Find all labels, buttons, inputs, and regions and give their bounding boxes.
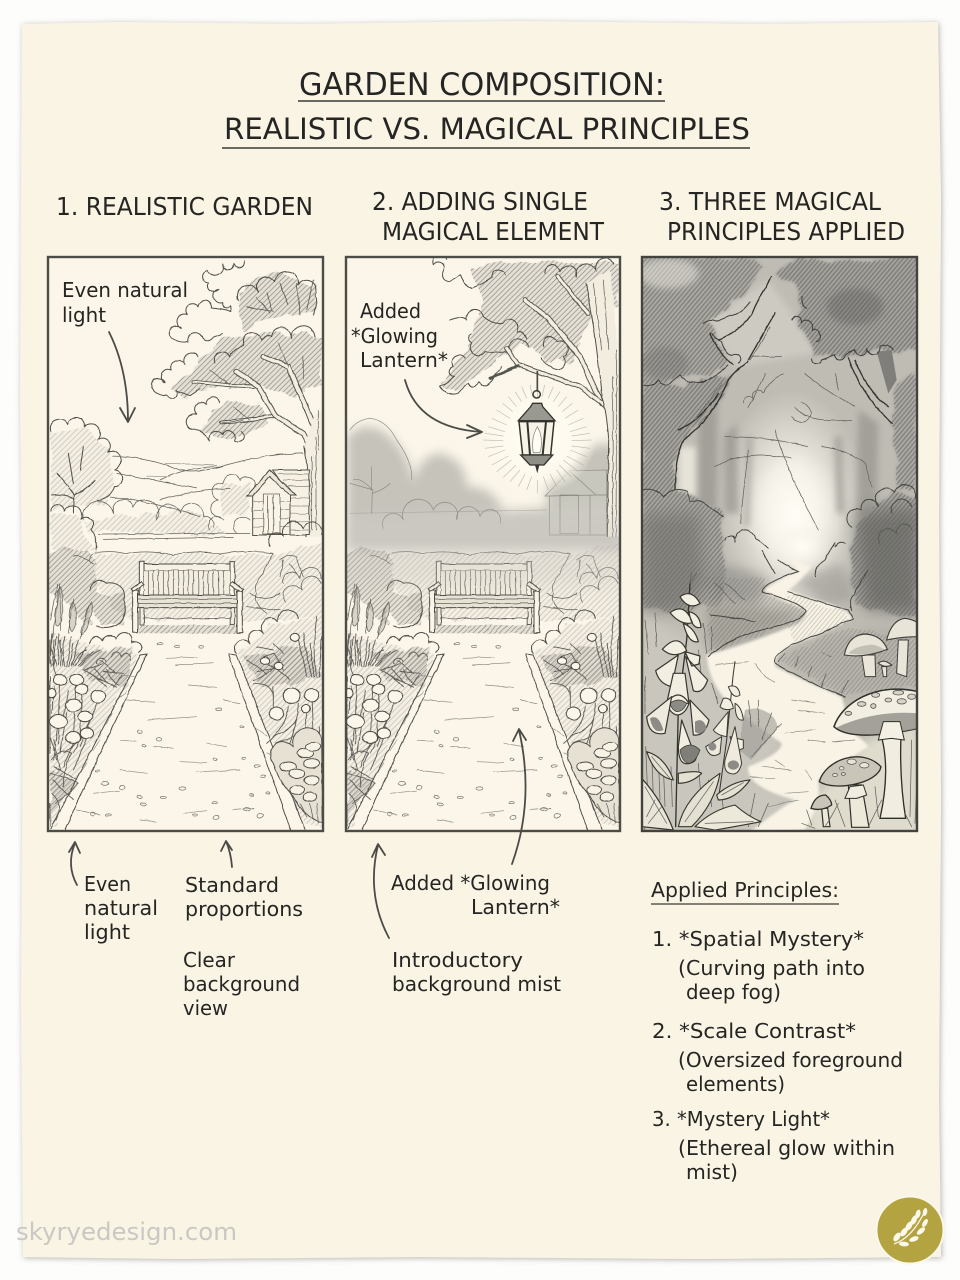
caption: added glowing lantern xyxy=(391,871,560,919)
caption: introductory background mist: Introductory xyxy=(392,948,523,972)
icon: medium mushrooms xyxy=(802,740,918,828)
icon: wheat badge xyxy=(876,1196,944,1264)
heading: column 3 xyxy=(659,187,905,246)
caption: standard proportions xyxy=(185,873,303,921)
caption: clear background view: view xyxy=(183,996,228,1020)
illustration: bench, path and flower beds xyxy=(47,551,323,830)
arrow: column 1 left xyxy=(69,842,80,885)
list item: scale contrast: elements) xyxy=(686,1072,785,1096)
icon: large mushroom xyxy=(834,689,918,818)
label: added glowing lantern: Added xyxy=(360,299,421,323)
icon: glowing lantern xyxy=(478,371,597,495)
arrow: to lantern xyxy=(405,380,482,438)
illustration: faint mist over hedge xyxy=(340,520,630,586)
heading: column 2 xyxy=(372,187,605,246)
caption: introductory background mist xyxy=(392,948,561,996)
arrow: to mist xyxy=(372,844,389,938)
caption: clear background view: Clear xyxy=(183,948,236,972)
illustration: flower bed shading xyxy=(347,542,619,827)
watermark: skyryedesign.com xyxy=(16,1218,237,1246)
caption: clear background view xyxy=(183,948,300,1020)
arrow: light downward xyxy=(109,332,135,422)
illustration: misty forest xyxy=(643,258,916,619)
list item: spatial mystery: (Curving path into xyxy=(678,956,865,980)
illustration: tree limbs xyxy=(193,343,323,537)
illustration: flower bed shading xyxy=(49,542,322,827)
label: light: light xyxy=(62,303,106,327)
label: added glowing lantern: Lantern* xyxy=(360,348,448,372)
icon: tall foxglove xyxy=(647,572,709,827)
caption: standard proportions: Standard xyxy=(185,873,279,897)
panel: adding single magical element xyxy=(344,256,622,832)
illustration: winding path, foxgloves and mushrooms xyxy=(643,501,916,830)
panel: three magical principles applied xyxy=(640,256,918,832)
list item: mystery light: mist) xyxy=(686,1160,738,1184)
caption: standard proportions: proportions xyxy=(185,897,303,921)
label: even natural light: Even natural xyxy=(62,278,188,302)
illustration: foreground leaves xyxy=(642,747,768,833)
caption: introductory background mist: background mist xyxy=(392,972,561,996)
illustration: canopy tones xyxy=(642,257,917,620)
caption: added glowing lantern: Added *Glowing xyxy=(391,871,550,895)
icon: small foxglove xyxy=(706,662,743,800)
label: added glowing lantern xyxy=(351,299,448,372)
heading: column 3: PRINCIPLES APPLIED xyxy=(667,217,905,246)
arrow: to path xyxy=(512,729,526,864)
caption: column 1 light note: Even xyxy=(84,872,131,896)
heading: column 2: MAGICAL ELEMENT xyxy=(382,217,605,246)
caption: column 1 light note: light xyxy=(84,920,130,944)
title xyxy=(222,67,750,148)
list item: scale contrast: (Oversized foreground xyxy=(678,1048,903,1072)
illustration: misty background and tree xyxy=(347,258,619,554)
illustration: foliage shading xyxy=(49,272,322,552)
list item: spatial mystery xyxy=(652,927,865,1004)
list item: mystery light xyxy=(652,1107,895,1184)
list item: spatial mystery: deep fog) xyxy=(686,980,781,1004)
caption: column 1 light note xyxy=(84,872,158,944)
illustration: tree limbs xyxy=(490,270,620,537)
illustration: tree and shed background xyxy=(50,260,323,549)
list item: mystery light: 3. *Mystery Light* xyxy=(652,1107,830,1131)
title: REALISTIC VS. MAGICAL PRINCIPLES xyxy=(224,112,750,146)
heading: column 1: 1. REALISTIC GARDEN xyxy=(56,192,313,221)
panel: realistic garden xyxy=(46,256,324,832)
label: added glowing lantern: *Glowing xyxy=(351,324,438,348)
list item: spatial mystery: 1. *Spatial Mystery* xyxy=(652,927,864,951)
heading: column 2: 2. ADDING SINGLE xyxy=(372,187,588,216)
caption: column 1 light note: natural xyxy=(84,896,158,920)
heading: column 3: 3. THREE MAGICAL xyxy=(659,187,881,216)
heading: applied principles: Applied Principles: xyxy=(651,878,839,902)
list item: scale contrast: 2. *Scale Contrast* xyxy=(652,1019,856,1043)
list item: mystery light: (Ethereal glow within xyxy=(678,1136,895,1160)
caption: added glowing lantern: Lantern* xyxy=(471,895,560,919)
illustration: bench, path and flower beds xyxy=(344,551,620,830)
icon: upper right mushrooms xyxy=(844,618,918,677)
caption: clear background view: background xyxy=(183,972,300,996)
arrow: column 1 right xyxy=(221,841,232,867)
title: GARDEN COMPOSITION: xyxy=(299,67,665,103)
list item: scale contrast xyxy=(652,1019,903,1096)
